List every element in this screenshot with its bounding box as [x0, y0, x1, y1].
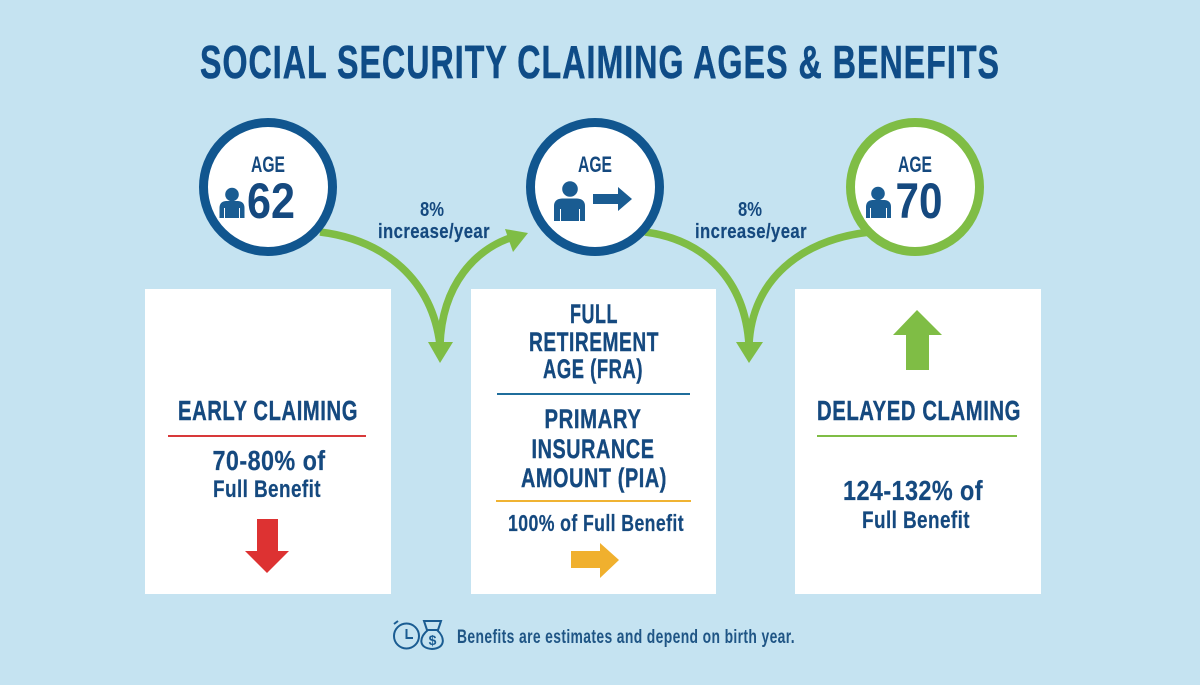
circle: age 62: AGE	[251, 152, 285, 177]
label: 8% increase right: 8%	[738, 199, 762, 221]
panel: full retirement age	[471, 289, 716, 594]
circle: age FRA: AGE	[578, 152, 612, 177]
icon: right arrow	[593, 187, 632, 211]
text: delayed benefit: 124-132% of	[843, 475, 983, 506]
heading: full retirement age: RETIREMENT	[529, 327, 659, 357]
label: 8% increase right: increase/year	[695, 221, 807, 243]
arrow: FRA to second gap	[645, 232, 763, 363]
heading: primary insurance amount: AMOUNT (PIA)	[521, 463, 667, 493]
heading: early claiming: EARLY CLAIMING	[178, 395, 358, 426]
label: 8% increase left: 8%	[420, 199, 444, 221]
arrow: age 62 to first gap	[320, 232, 453, 363]
circle: age 70: AGE	[898, 152, 932, 177]
footnote: Benefits are estimates and depend on birth year.	[457, 627, 795, 648]
heading: full retirement age: FULL	[570, 299, 618, 329]
heading: delayed claiming: DELAYED CLAMING	[817, 395, 1021, 426]
panel: delayed claiming	[795, 289, 1041, 594]
circle: age FRA	[530, 122, 660, 252]
icon: green up arrow	[893, 310, 942, 370]
circle: age 62: 62	[247, 173, 295, 229]
circle: age 62	[204, 122, 332, 252]
icon: clock and money bag: $	[429, 632, 437, 648]
panel: early claiming	[145, 289, 391, 594]
arrow: age 70 to second gap	[749, 232, 870, 345]
circle: age 70	[850, 122, 980, 252]
circle: age 70: 70	[896, 173, 942, 229]
label: 8% increase left	[378, 199, 490, 243]
icon: clock and money bag	[394, 621, 443, 649]
icon: person	[220, 188, 244, 218]
heading: primary insurance amount: INSURANCE	[532, 434, 654, 464]
text: early benefit: 70-80% of	[212, 445, 326, 476]
icon: yellow right arrow	[571, 543, 619, 578]
heading: primary insurance amount	[521, 404, 667, 493]
icon: person	[554, 181, 585, 221]
panel: early claiming: Full Benefit	[213, 476, 321, 503]
label: 8% increase left: increase/year	[378, 221, 490, 243]
heading: full retirement age	[529, 299, 659, 384]
label: 8% increase right	[695, 199, 807, 243]
heading: primary insurance amount: PRIMARY	[544, 404, 642, 434]
arrow: first gap to FRA	[440, 229, 528, 345]
heading: full retirement age: AGE (FRA)	[543, 354, 643, 384]
icon: red down arrow	[245, 519, 289, 573]
text: full benefit: 100% of Full Benefit	[508, 510, 684, 536]
icon: person	[866, 187, 891, 218]
panel: delayed claiming: Full Benefit	[862, 507, 970, 534]
